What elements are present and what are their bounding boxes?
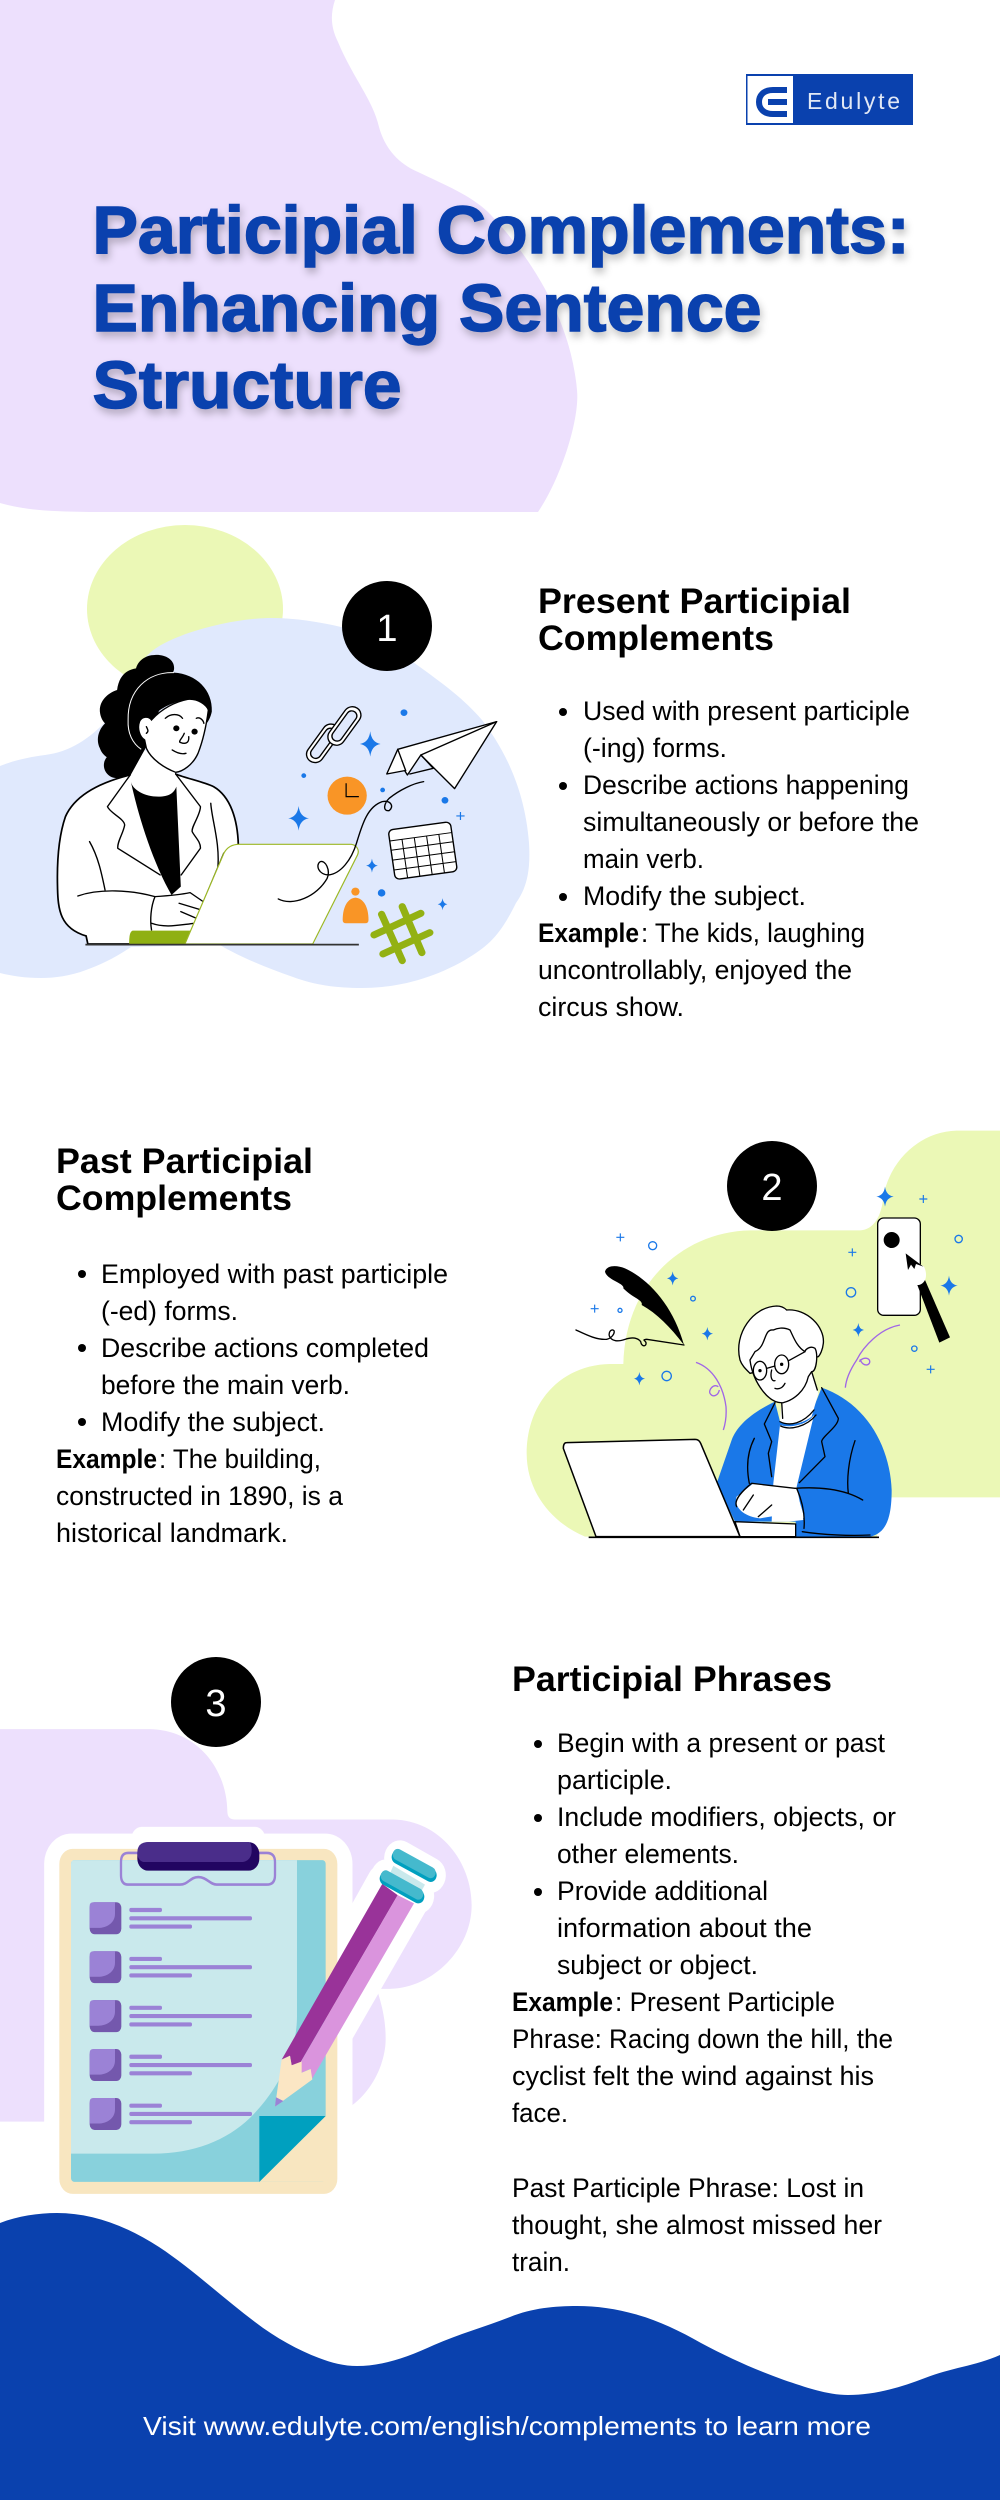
hand <box>151 893 203 930</box>
title: Structure <box>92 348 402 423</box>
section 2 text: Modify the subject. <box>101 1407 325 1437</box>
icon: feather <box>605 1266 684 1345</box>
footer wave <box>0 2213 1000 2500</box>
section 3 text: Begin with a present or past <box>557 1728 886 1758</box>
section 1 illustration: woman at laptop <box>0 525 529 988</box>
section 1 heading <box>538 582 851 658</box>
title: Enhancing Sentence <box>92 271 762 346</box>
section 1 text: main verb. <box>583 844 704 874</box>
curly line <box>278 782 424 902</box>
section 3 text: information about the <box>557 1913 812 1943</box>
number badge 2 <box>727 1141 817 1231</box>
shirt <box>772 1415 814 1522</box>
section 2 illustration: man at laptop <box>527 1131 1000 1537</box>
face <box>139 699 208 772</box>
icon: calendar <box>388 822 457 880</box>
section 3 illustration: clipboard and pencil <box>0 1729 472 2210</box>
section 3 text: face. <box>512 2098 568 2128</box>
section 1 text: simultaneously or before the <box>583 807 919 837</box>
icon: sparkles and dots <box>288 709 465 910</box>
head and neck <box>780 1372 818 1424</box>
keyboard <box>735 1522 796 1537</box>
number badge 2: 2 <box>761 1167 783 1209</box>
icon: clock <box>328 777 367 815</box>
section 3 text: subject or object. <box>557 1950 758 1980</box>
hair front <box>128 673 212 750</box>
jacket lines <box>78 774 218 897</box>
pencil <box>275 1854 431 2107</box>
icon: paper plane <box>387 722 497 789</box>
section 2 text: Example <box>56 1444 157 1474</box>
section 3 text: Example <box>512 1987 613 2017</box>
glasses <box>753 1352 805 1389</box>
section 2 text: Describe actions completed <box>101 1333 429 1363</box>
page fold <box>259 2116 328 2182</box>
lavender blob <box>0 1729 472 2122</box>
footer text: Visit www.edulyte.com/english/complements to learn more <box>143 2411 871 2441</box>
logo: Edulyte <box>746 74 913 125</box>
number badge 1: 1 <box>376 608 398 650</box>
section 2 text: constructed in 1890, is a <box>56 1481 343 1511</box>
section 1 text: : The kids, laughing <box>641 918 865 948</box>
section 3 text: Past Participle Phrase: Lost in <box>512 2173 864 2203</box>
jacket lines <box>748 1388 870 1535</box>
purple curls <box>696 1325 900 1430</box>
section 1 text <box>538 696 919 1022</box>
icon: phone and brush <box>878 1218 950 1343</box>
header background blob <box>0 0 577 512</box>
lime blob <box>87 525 283 693</box>
section 3 text: train. <box>512 2247 570 2277</box>
section 2 heading <box>56 1142 313 1218</box>
section 1 heading: Present Participial <box>538 582 851 621</box>
icon: hash <box>374 907 430 961</box>
section 3 text: : Present Participle <box>615 1987 835 2017</box>
neck <box>130 750 176 787</box>
section 2 heading: Past Participial <box>56 1142 313 1181</box>
icon: sparkles, plus marks and rings <box>591 1187 962 1385</box>
section 1 text: Used with present participle <box>583 696 910 726</box>
section 3 text: other elements. <box>557 1839 739 1869</box>
hand <box>736 1483 804 1518</box>
icon: person <box>343 888 369 923</box>
black shirt <box>131 782 181 895</box>
section 1 text: (-ing) forms. <box>583 733 727 763</box>
section 2 text: : The building, <box>159 1444 321 1474</box>
clip <box>121 1853 275 1885</box>
section 1 text: Modify the subject. <box>583 881 806 911</box>
section 2 text: before the main verb. <box>101 1370 350 1400</box>
jacket <box>57 767 238 944</box>
pale blue blob <box>0 618 529 988</box>
section 3 text: Phrase: Racing down the hill, the <box>512 2024 893 2054</box>
number badge 3 <box>171 1657 261 1747</box>
title <box>92 193 910 423</box>
section 1 text: Describe actions happening <box>583 770 909 800</box>
section 1 text: circus show. <box>538 992 684 1022</box>
section 3 heading: Participial Phrases <box>512 1660 832 1699</box>
lime blob <box>527 1131 1000 1537</box>
section 3 text: thought, she almost missed her <box>512 2210 882 2240</box>
laptop <box>185 844 358 944</box>
icon: chain links <box>303 703 364 766</box>
logo: Edulyte: Edulyte <box>807 88 900 114</box>
section 1 text: uncontrollably, enjoyed the <box>538 955 852 985</box>
section 1 text: Example <box>538 918 639 948</box>
face details <box>173 725 179 731</box>
paper <box>71 1860 326 2182</box>
section 2 heading: Complements <box>56 1179 292 1218</box>
title: Participial Complements: <box>92 193 910 268</box>
number badge 1 <box>342 581 432 671</box>
desk line <box>85 942 359 947</box>
section 2 text <box>56 1259 448 1548</box>
hair back <box>98 655 174 778</box>
section 2 text: Employed with past participle <box>101 1259 448 1289</box>
checklist items <box>90 1902 252 2130</box>
section 3 text: cyclist felt the wind against his <box>512 2061 874 2091</box>
clipboard board <box>59 1849 337 2194</box>
section 2 text: historical landmark. <box>56 1518 288 1548</box>
section 3 text: Include modifiers, objects, or <box>557 1802 896 1832</box>
section 3 text: participle. <box>557 1765 672 1795</box>
section 2 text: (-ed) forms. <box>101 1296 238 1326</box>
section 3 text: Provide additional <box>557 1876 768 1906</box>
white sticker outline <box>44 1827 430 2210</box>
green keyboard <box>129 931 191 944</box>
laptop <box>563 1439 740 1537</box>
number badge 3: 3 <box>205 1683 227 1725</box>
section 1 heading: Complements <box>538 619 774 658</box>
section 3 text <box>512 1728 896 2277</box>
jacket <box>717 1388 892 1537</box>
